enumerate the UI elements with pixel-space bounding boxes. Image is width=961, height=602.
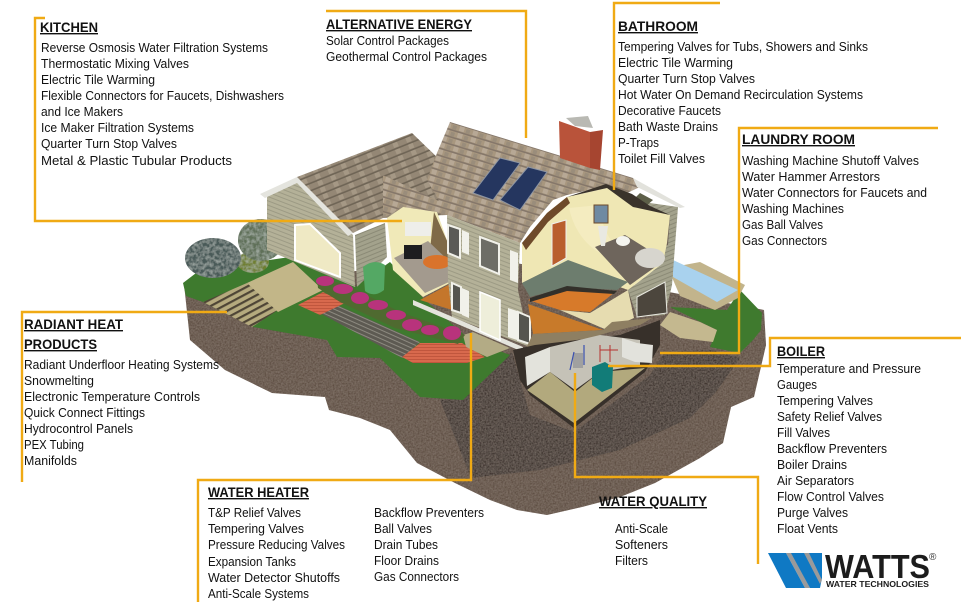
porch floor	[420, 283, 452, 310]
bathroom window	[594, 205, 608, 223]
chimney	[559, 116, 603, 170]
list: boiler products: Boiler Drains	[777, 458, 847, 472]
leader line: boiler	[608, 338, 961, 366]
list: boiler products: Float Vents	[777, 522, 838, 536]
list: water heater products column 1: Tempering Valves	[208, 522, 304, 536]
list: bathroom products: Bath Waste Drains	[618, 120, 718, 134]
garage roof	[297, 133, 447, 233]
list: kitchen products: Electric Tile Warming	[41, 73, 155, 87]
leader line: laundry room	[660, 128, 938, 353]
list: water heater products column 1: Anti-Scale Systems	[208, 587, 309, 601]
front door	[480, 292, 500, 340]
list: boiler products	[777, 362, 921, 536]
lawn	[183, 257, 762, 400]
list: water heater products column 1: T&P Relief Valves	[208, 506, 301, 520]
list: boiler products: Temperature and Pressure	[777, 362, 921, 376]
heading: bathroom: BATHROOM	[618, 18, 698, 34]
main roof	[427, 122, 640, 243]
list: boiler products: Backflow Preventers	[777, 442, 887, 456]
wordmark: WATTS	[825, 548, 930, 585]
left lawn	[183, 257, 510, 400]
toilet	[616, 236, 630, 246]
bushes	[185, 219, 284, 278]
list: bathroom products: Electric Tile Warming	[618, 56, 733, 70]
partition	[569, 205, 640, 280]
list: boiler products: Tempering Valves	[777, 394, 873, 408]
interior door	[552, 220, 566, 266]
list: laundry products: Washing Machines	[742, 202, 844, 216]
leader line: water quality	[575, 373, 758, 564]
floor section	[525, 286, 652, 350]
list: boiler products: Flow Control Valves	[777, 490, 884, 504]
garage	[260, 133, 447, 287]
list: water quality products: Filters	[615, 554, 648, 568]
heading: radiant heat products: PRODUCTS	[24, 336, 97, 352]
list: radiant heat products: PEX Tubing	[24, 438, 84, 452]
list: water heater products column 2: Backflow Preventers	[374, 506, 484, 520]
panel: radiant heat products	[24, 316, 219, 468]
list: bathroom products: Decorative Faucets	[618, 104, 721, 118]
radiant driveway coils	[203, 283, 278, 327]
brick pads	[298, 292, 485, 363]
list: kitchen products: Metal & Plastic Tubular Products	[41, 153, 233, 168]
list: laundry products: Washing Machine Shutoff Valves	[742, 154, 919, 168]
kitchen cutaway	[383, 175, 451, 297]
heading: alternative energy: ALTERNATIVE ENERGY	[326, 16, 473, 32]
list: laundry products: Gas Connectors	[742, 234, 827, 248]
garage gable trim	[260, 177, 353, 236]
counters and appliances	[394, 241, 450, 293]
list: kitchen products	[41, 41, 284, 168]
tub	[635, 248, 665, 268]
list: water heater products column 2: Drain Tubes	[374, 538, 438, 552]
list: kitchen products: Ice Maker Filtration Systems	[41, 121, 194, 135]
list: water quality products: Softeners	[615, 538, 668, 552]
sliding door	[637, 282, 667, 317]
list: radiant heat products: Radiant Underfloor Heating Systems	[24, 358, 219, 372]
list: laundry products: Water Hammer Arrestors	[742, 170, 880, 184]
list: water quality products: Anti-Scale	[615, 522, 668, 536]
list: boiler products: Gauges	[777, 378, 817, 392]
driveway	[247, 262, 323, 312]
panel: alternative energy	[326, 16, 487, 64]
list: radiant heat products: Hydrocontrol Panels	[24, 422, 133, 436]
right eave	[633, 178, 685, 208]
cabinets	[405, 222, 431, 236]
front wall	[413, 215, 530, 352]
list: kitchen products: and Ice Makers	[41, 105, 123, 119]
list: alternative energy products: Geothermal Control Packages	[326, 50, 487, 64]
leader line: kitchen	[35, 18, 402, 221]
leader line: radiant heat	[22, 312, 227, 482]
registered mark: ®	[929, 552, 937, 563]
house island illustration	[183, 116, 766, 515]
list: bathroom products: Quarter Turn Stop Valves	[618, 72, 755, 86]
list: water heater products column 1: Water Detector Shutoffs	[208, 571, 340, 585]
list: bathroom products: P-Traps	[618, 136, 659, 150]
list: water heater products column 1: Expansion Tanks	[208, 555, 296, 569]
heading: boiler: BOILER	[777, 343, 825, 359]
stone step	[463, 332, 510, 357]
garage door	[295, 224, 340, 277]
list: boiler products: Safety Relief Valves	[777, 410, 882, 424]
panel: laundry room	[742, 131, 927, 248]
list: radiant heat products: Electronic Temperature Controls	[24, 390, 200, 404]
gable shadow	[630, 193, 653, 207]
list: radiant heat products: Snowmelting	[24, 374, 94, 388]
tagline: WATER TECHNOLOGIES	[826, 579, 929, 589]
washer and dryer	[622, 338, 653, 363]
walkway coils	[320, 305, 420, 358]
table	[423, 255, 451, 269]
right lawn	[670, 290, 762, 353]
upper windows	[448, 225, 518, 283]
leader line: water heater	[198, 333, 471, 602]
list: laundry products: Gas Ball Valves	[742, 218, 823, 232]
lower windows	[452, 283, 530, 344]
list: kitchen products: Reverse Osmosis Water Filtration Systems	[41, 41, 268, 55]
list: water heater products column 2: Floor Drains	[374, 554, 439, 568]
upper floor cutaway	[522, 184, 670, 297]
flower bed	[316, 276, 465, 344]
logo: watts water technologies	[768, 548, 937, 589]
panel: bathroom	[618, 18, 868, 166]
panel: water quality	[599, 493, 708, 568]
heading: radiant heat products: RADIANT HEAT	[24, 316, 123, 332]
heading: laundry room: LAUNDRY ROOM	[742, 131, 855, 147]
stone wall	[655, 215, 670, 250]
list: bathroom products: Hot Water On Demand Recirculation Systems	[618, 88, 863, 102]
leader line: bathroom	[614, 3, 720, 190]
icon: blue W mark	[768, 553, 822, 588]
list: boiler products: Air Separators	[777, 474, 854, 488]
list: laundry products: Water Connectors for Faucets and	[742, 186, 927, 200]
list: bathroom products: Tempering Valves for Tubs, Showers and Sinks	[618, 40, 868, 54]
list: water heater products column 2: Ball Valves	[374, 522, 432, 536]
list: water heater products column 1: Pressure Reducing Valves	[208, 538, 345, 552]
list: kitchen products: Quarter Turn Stop Valves	[41, 137, 177, 151]
list: bathroom products	[618, 40, 868, 166]
list: alternative energy products: Solar Control Packages	[326, 34, 449, 48]
list: water heater products column 2: Gas Connectors	[374, 570, 459, 584]
list: water heater products column 2	[374, 506, 484, 584]
list: kitchen products: Flexible Connectors for Faucets, Dishwashers	[41, 89, 284, 103]
list: boiler products: Fill Valves	[777, 426, 830, 440]
list: bathroom products: Toilet Fill Valves	[618, 152, 705, 166]
list: laundry products	[742, 154, 927, 248]
leader line: alternative energy	[326, 11, 526, 138]
list: boiler products: Purge Valves	[777, 506, 848, 520]
water heater	[573, 353, 583, 368]
sink	[598, 226, 608, 246]
list: radiant heat products: Manifolds	[24, 454, 77, 468]
pool	[660, 260, 745, 342]
list: alternative energy products	[326, 34, 487, 64]
list: water quality products	[615, 522, 668, 568]
upper floor surface	[522, 260, 628, 297]
soil block	[184, 260, 766, 515]
boiler	[592, 362, 613, 392]
panel: kitchen	[40, 19, 284, 168]
list: water heater products column 1	[208, 506, 345, 601]
list: radiant heat products	[24, 358, 219, 468]
bathroom floor	[595, 235, 665, 285]
rain barrel	[363, 262, 385, 294]
heading: water quality: WATER QUALITY	[599, 493, 708, 509]
heading: kitchen: KITCHEN	[40, 19, 98, 35]
basement	[513, 320, 660, 428]
list: radiant heat products: Quick Connect Fittings	[24, 406, 145, 420]
list: kitchen products: Thermostatic Mixing Valves	[41, 57, 189, 71]
panel: boiler	[777, 343, 921, 536]
panel: water heater	[208, 484, 484, 601]
heading: water heater: WATER HEATER	[208, 484, 309, 500]
solar panels	[473, 158, 547, 210]
right side wall	[628, 178, 685, 317]
heading: radiant heat products	[24, 316, 123, 352]
